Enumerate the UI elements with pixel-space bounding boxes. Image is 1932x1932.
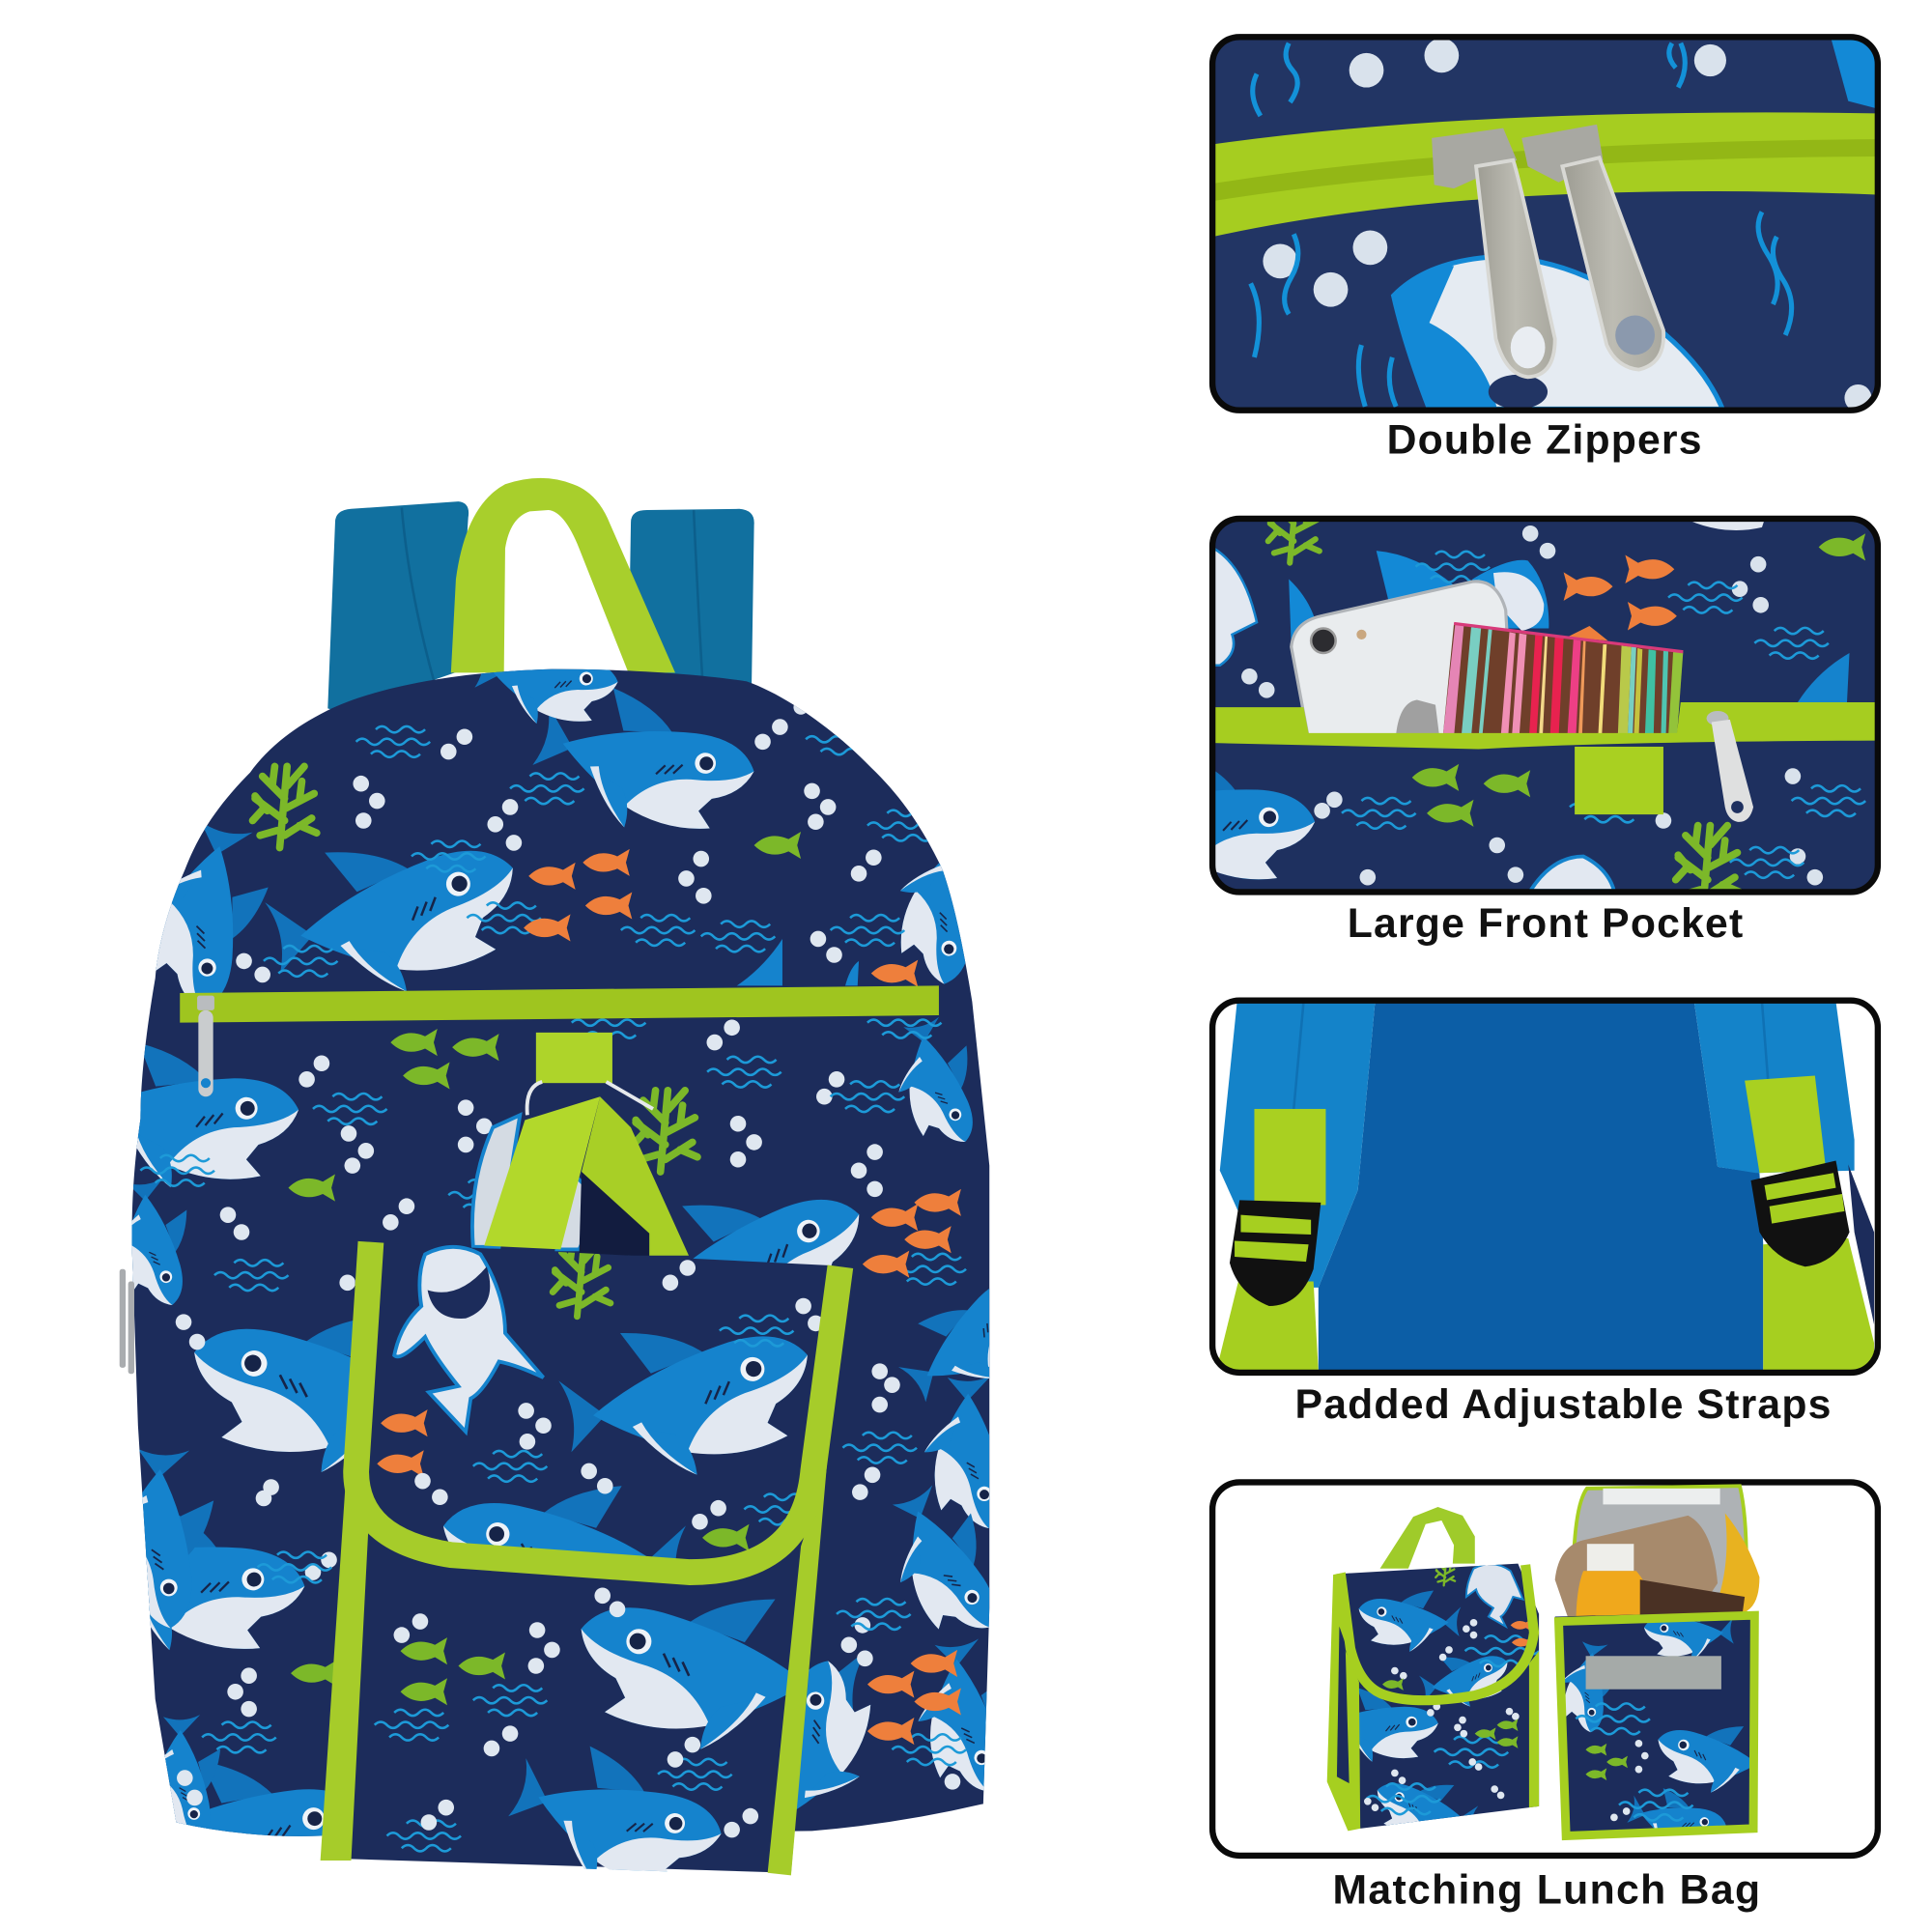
lime pocket zipper bbox=[1213, 702, 1877, 750]
closed bag body bbox=[1346, 1564, 1539, 1829]
gusset inner bbox=[1337, 1627, 1355, 1786]
left lime tab bbox=[1254, 1109, 1325, 1205]
banana bbox=[1716, 1513, 1759, 1614]
lunch bag handle back band bbox=[582, 1096, 689, 1256]
lunch bag lower body bbox=[323, 1497, 823, 1873]
wave lines bbox=[140, 724, 966, 1765]
sandwich bbox=[1555, 1516, 1718, 1627]
right strap crease bbox=[694, 510, 702, 678]
closed lunch bag bbox=[1317, 1507, 1539, 1854]
juice bottle bbox=[1576, 1544, 1654, 1627]
zipper teeth bbox=[1213, 148, 1877, 192]
lime tab bbox=[1575, 747, 1663, 814]
velcro strip bbox=[1586, 1656, 1721, 1690]
straps close-up photo bbox=[1213, 1002, 1877, 1372]
caption: large front pocket: Large Front Pocket bbox=[1348, 900, 1743, 947]
white shark close-up bbox=[1394, 256, 1722, 409]
caption: double zippers: Double Zippers bbox=[1387, 416, 1701, 463]
front zipper bbox=[180, 985, 939, 1023]
white lid strip bbox=[1603, 1489, 1720, 1504]
right lime strap lower bbox=[1763, 1238, 1874, 1372]
panel: double zippers bbox=[1212, 37, 1878, 412]
plastic tag tie bbox=[527, 1082, 653, 1115]
padded back panel bbox=[1319, 1002, 1763, 1372]
panel: matching lunch bag bbox=[1212, 1482, 1878, 1861]
open lunch bag bbox=[1555, 1486, 1776, 1861]
right shoulder strap bbox=[629, 509, 754, 685]
open bag lime trim bbox=[1559, 1615, 1754, 1836]
left padded strap bbox=[1220, 1002, 1375, 1288]
right buckle bbox=[1750, 1161, 1850, 1266]
front-facing white shark bbox=[394, 1247, 543, 1432]
open bag body bbox=[1555, 1611, 1756, 1839]
striped card bbox=[1443, 623, 1683, 737]
left buckle bbox=[1230, 1200, 1321, 1306]
close-up eye bbox=[1489, 375, 1548, 409]
pocket sharks bbox=[1101, 520, 1850, 897]
flap print bbox=[377, 1252, 821, 1559]
lunch bag flap bbox=[345, 1242, 855, 1584]
zipper close-up photo bbox=[1213, 39, 1877, 412]
top carry handle bbox=[451, 478, 675, 672]
panel frame bbox=[1212, 1001, 1878, 1373]
left lime strap lower bbox=[1216, 1282, 1319, 1372]
far right sliver bbox=[1848, 1164, 1874, 1324]
flap trim bbox=[356, 1242, 840, 1573]
pocket zipper pull bbox=[1707, 711, 1753, 822]
caption: matching lunch bag: Matching Lunch Bag bbox=[1332, 1867, 1760, 1914]
zipper pull one bbox=[1432, 128, 1555, 377]
closed bag print bbox=[1317, 1561, 1539, 1854]
pocket close-up photo bbox=[1101, 497, 1877, 907]
right padded strap bbox=[1694, 1002, 1855, 1173]
zipper pull bbox=[197, 996, 214, 1096]
zipper pull two bbox=[1521, 125, 1663, 370]
small shark behind lunch bag handle bbox=[472, 1115, 618, 1249]
close-up bubbles bbox=[1263, 39, 1872, 412]
panel: large front pocket bbox=[1101, 497, 1878, 907]
side zipper pulls bbox=[120, 1269, 134, 1374]
pocket seaweed bbox=[1268, 497, 1740, 907]
caption: padded adjustable straps: Padded Adjustable Straps bbox=[1295, 1381, 1831, 1428]
right lime tab bbox=[1745, 1076, 1826, 1173]
close-up waves bbox=[1251, 43, 1792, 407]
left strap crease bbox=[1293, 1002, 1303, 1109]
orange fish bbox=[524, 849, 961, 1745]
lunch bag side trims bbox=[321, 1466, 827, 1875]
green fish bbox=[288, 832, 801, 1687]
lunch bag lower print bbox=[373, 1588, 810, 1872]
left shoulder strap bbox=[327, 501, 469, 712]
closed bag flap trim bbox=[1341, 1565, 1534, 1700]
panel frame bbox=[1212, 519, 1878, 892]
front strap loop bbox=[536, 1033, 612, 1083]
lunch bag handle front band bbox=[484, 1096, 600, 1249]
shark print on backpack bbox=[120, 668, 989, 1876]
closed bag gusset bbox=[1327, 1573, 1360, 1831]
seaweed bbox=[252, 766, 697, 1172]
blue corner patch bbox=[1831, 39, 1877, 108]
lime zipper band bbox=[1213, 112, 1877, 237]
bubbles bbox=[176, 699, 960, 1805]
dark wedge under handle bbox=[579, 1172, 649, 1256]
smartphone bbox=[1292, 582, 1513, 739]
pocket fish bbox=[1412, 533, 1865, 827]
pocket bubbles and waves bbox=[1241, 526, 1865, 885]
backpack body bbox=[131, 669, 989, 1836]
panel frame bbox=[1212, 37, 1878, 411]
panel frame bbox=[1212, 1482, 1878, 1856]
backpack product photo bbox=[120, 477, 989, 1876]
left strap crease bbox=[402, 508, 434, 680]
grey inner lining bbox=[1573, 1486, 1747, 1614]
closed bag front trims bbox=[1346, 1651, 1539, 1829]
cookie box bbox=[1640, 1579, 1745, 1624]
open bag print bbox=[1557, 1605, 1776, 1861]
closed bag handle bbox=[1380, 1507, 1475, 1569]
lunch bag bbox=[321, 1242, 855, 1910]
panel: padded adjustable straps bbox=[1212, 1001, 1878, 1373]
right strap crease bbox=[1762, 1002, 1768, 1082]
